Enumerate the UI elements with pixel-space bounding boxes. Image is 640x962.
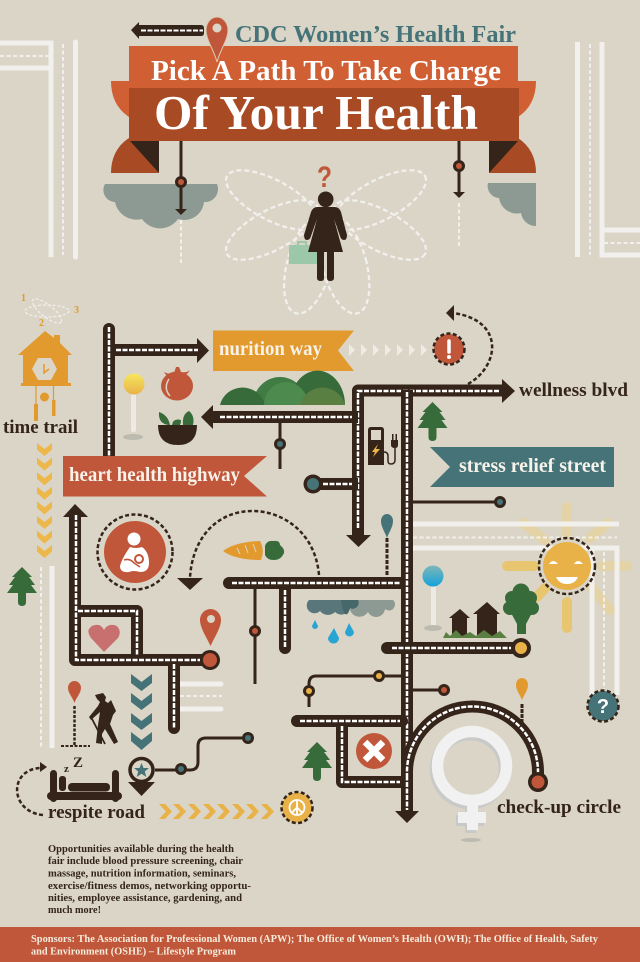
title: CDC Women’s Health Fair (235, 22, 516, 48)
cuckoo clock numbers (21, 293, 79, 329)
connector to teal node (413, 496, 506, 508)
white roads: centre stub (180, 684, 222, 709)
icon: shrubs (220, 371, 345, 405)
icon: teal pin (381, 514, 393, 576)
footer: sponsors: and Environment (OSHE) – Lifestyle Program (31, 946, 236, 958)
white roads: top left (0, 42, 76, 257)
road: left branch (201, 405, 358, 429)
node: teal ring (304, 474, 322, 494)
cuckoo clock numbers: 2 (39, 318, 44, 329)
thin connector with red node (249, 589, 261, 684)
icon: right cloud (488, 183, 536, 226)
thin connector: yellow nodes (303, 670, 404, 707)
thin connector: red node (413, 684, 450, 696)
dashed carrot arrow (177, 511, 319, 590)
icon: venus symbol (436, 732, 506, 842)
label: check-up circle: check-up circle (497, 797, 621, 818)
white roads: top right (578, 42, 640, 257)
icon: question circle (588, 690, 618, 722)
icon: orange pin (516, 678, 528, 722)
icon: peace sign (282, 792, 312, 823)
banner: lower ribbon (129, 85, 519, 141)
text block: opportunities: massage, nutrition information, seminars, (48, 868, 236, 880)
text block: opportunities: nities, employee assistance, gardening, and (48, 893, 242, 904)
icon: sun rays (507, 507, 627, 628)
text block: opportunities: exercise/fitness demos, networking opportu- (48, 881, 252, 892)
dashed return arrow (446, 305, 492, 384)
label: wellness blvd: wellness blvd (519, 380, 628, 401)
icon: question circle: ? (597, 696, 609, 718)
icon: hiker (89, 693, 118, 744)
icon: tree centre (418, 402, 448, 441)
footer: sponsors (0, 927, 640, 962)
banner: nutrition way (213, 330, 354, 371)
banner: stress relief street (430, 447, 614, 487)
dashed petals (218, 158, 434, 319)
icon: tree left (7, 567, 37, 606)
dashed scribble (25, 295, 69, 327)
icon: blue lollipop (422, 566, 444, 631)
road: stress branch (313, 478, 358, 490)
yellow chevrons (37, 443, 52, 558)
cuckoo clock numbers: 3 (74, 305, 79, 316)
heading: pick a path: Pick A Path To Take Charge (151, 56, 501, 87)
icon: briefcase (289, 242, 317, 264)
icon: charging station (368, 427, 398, 465)
icon: tomato (161, 367, 193, 400)
connector from star (155, 732, 254, 775)
top arrow (131, 22, 204, 39)
text block: opportunities: fair include blood pressure screening, chair (48, 856, 243, 867)
banner: nutrition way: nurition way (219, 338, 322, 360)
road: nutrition way (109, 327, 209, 458)
road: wellness blvd and vertical (346, 379, 515, 547)
hiker stick (91, 717, 105, 744)
text block: opportunities (48, 844, 252, 916)
banner: heart health highway: heart health highway (69, 464, 240, 486)
teal chevrons (131, 674, 152, 750)
icon: rain cloud (307, 600, 395, 644)
banner: stress relief street: stress relief street (459, 455, 606, 477)
icon: exclamation (434, 334, 464, 364)
node: red ring (200, 650, 220, 670)
road: check-up arc (407, 706, 538, 782)
icon: star marker (128, 758, 155, 796)
icon: small red pin (61, 681, 90, 746)
right sign arrow (453, 141, 465, 198)
icon: bed: z (64, 763, 69, 775)
icon: X circle (356, 733, 392, 769)
icon: yellow lollipop (123, 374, 144, 440)
banner: heart health highway (63, 456, 267, 496)
node: red ring (528, 772, 548, 792)
road: crossing at 583 (229, 583, 405, 648)
road: lower loop (297, 721, 402, 782)
icon: sun face (539, 538, 595, 594)
icon: heart (88, 625, 120, 652)
icon: woman figure (304, 192, 347, 281)
banner: top ribbon (129, 46, 518, 89)
left sign arrow (175, 141, 187, 215)
white roads: right mid (413, 524, 619, 695)
node: yellow ring (511, 638, 531, 658)
road: heart health loop (63, 504, 205, 728)
dashed bed arrow (17, 762, 47, 815)
dashed path right (458, 203, 460, 246)
icon: question mark: ? (317, 161, 332, 194)
white roads: left mid (41, 566, 52, 748)
icon: cuckoo clock (18, 331, 72, 421)
icon: tree lower (302, 742, 332, 781)
footer: sponsors: Sponsors: The Association for Professional Women (APW); The Office of Women’s Health (OWH); The Office of Health, Safety (31, 934, 599, 945)
text block: opportunities: Opportunities available during the health (48, 844, 234, 855)
icon: carrot (223, 541, 284, 560)
cuckoo clock numbers: 1 (21, 293, 26, 304)
icon: red pin (200, 609, 221, 646)
label: respite road: respite road (48, 802, 145, 823)
icon: left cloud (103, 184, 218, 228)
dashed path left (180, 220, 182, 264)
text block: opportunities: much more! (48, 905, 101, 916)
road: east branch (387, 642, 515, 654)
banner wings (111, 81, 536, 173)
road: main vertical (395, 390, 419, 823)
icon: bed (47, 755, 122, 802)
yellow arrow chevrons (159, 804, 274, 819)
icon: salad bowl (158, 411, 197, 445)
icon: top location pin (206, 17, 228, 62)
icon: breastfeeding (98, 514, 172, 590)
icon: green tree (503, 584, 539, 634)
icon: houses (443, 602, 507, 638)
heading: of your health: Of Your Health (154, 85, 478, 140)
white triangles (349, 344, 427, 356)
label: time trail: time trail (3, 417, 78, 438)
icon: bed: Z (73, 755, 83, 771)
thin connector (274, 423, 286, 469)
